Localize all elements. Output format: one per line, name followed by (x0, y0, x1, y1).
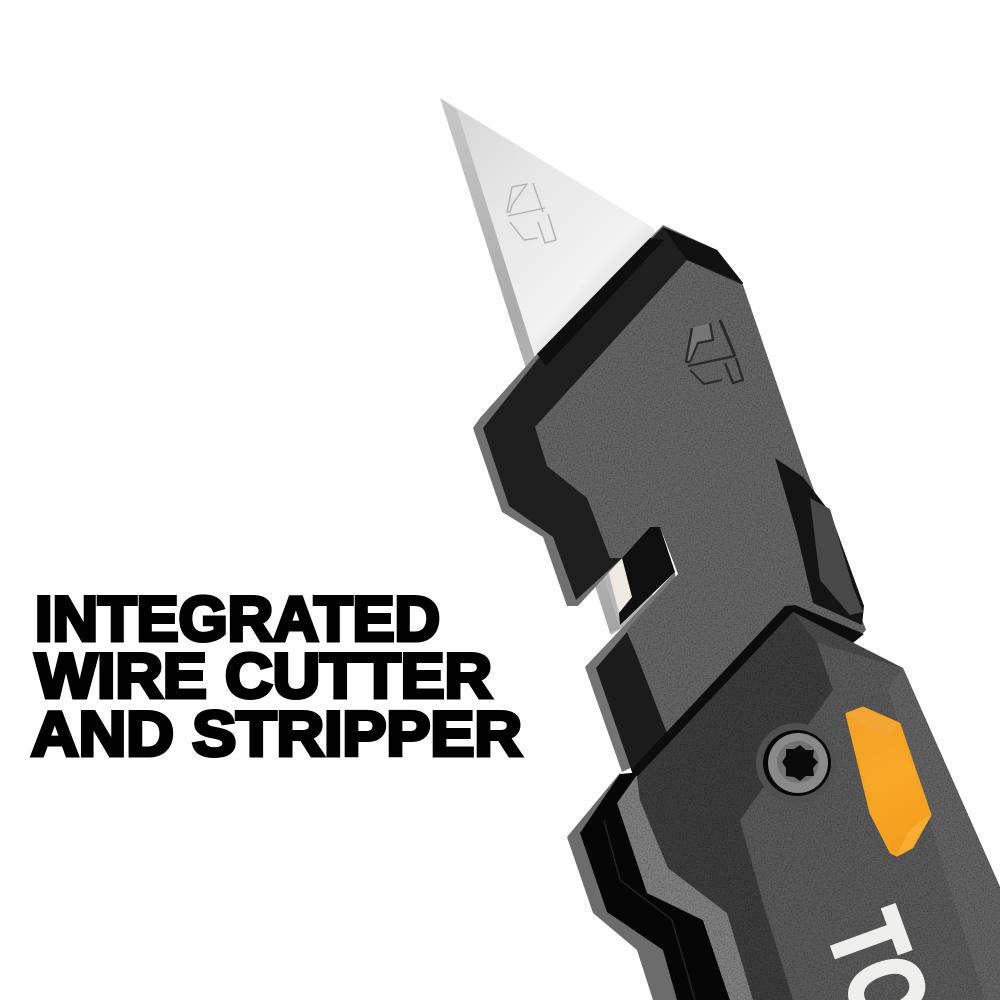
lower head shoulder (585, 572, 690, 775)
knife head: grey textured face (535, 260, 866, 790)
dark facet around screw (637, 612, 833, 1000)
knife head: black rim and jaw (473, 225, 743, 606)
wire cutter notch (619, 527, 675, 625)
utility knife illustration (440, 98, 1000, 1000)
knife blade (440, 98, 700, 635)
heading: AND STRIPPER (31, 700, 522, 770)
back plate (567, 772, 730, 1000)
orange slide button (847, 708, 930, 855)
heading: INTEGRATED (35, 584, 440, 654)
right edge strip (888, 668, 1000, 1000)
icon: torx screw (756, 723, 836, 803)
side blade release tab (775, 458, 864, 625)
heading: WIRE CUTTER (35, 642, 492, 712)
icon: embossed logo on head (686, 320, 743, 384)
icon: blade logo etching (507, 183, 556, 243)
heading (31, 584, 522, 770)
handle body (631, 605, 1000, 1000)
handle rim (617, 775, 753, 1000)
lighter centre facet (740, 643, 1000, 1000)
